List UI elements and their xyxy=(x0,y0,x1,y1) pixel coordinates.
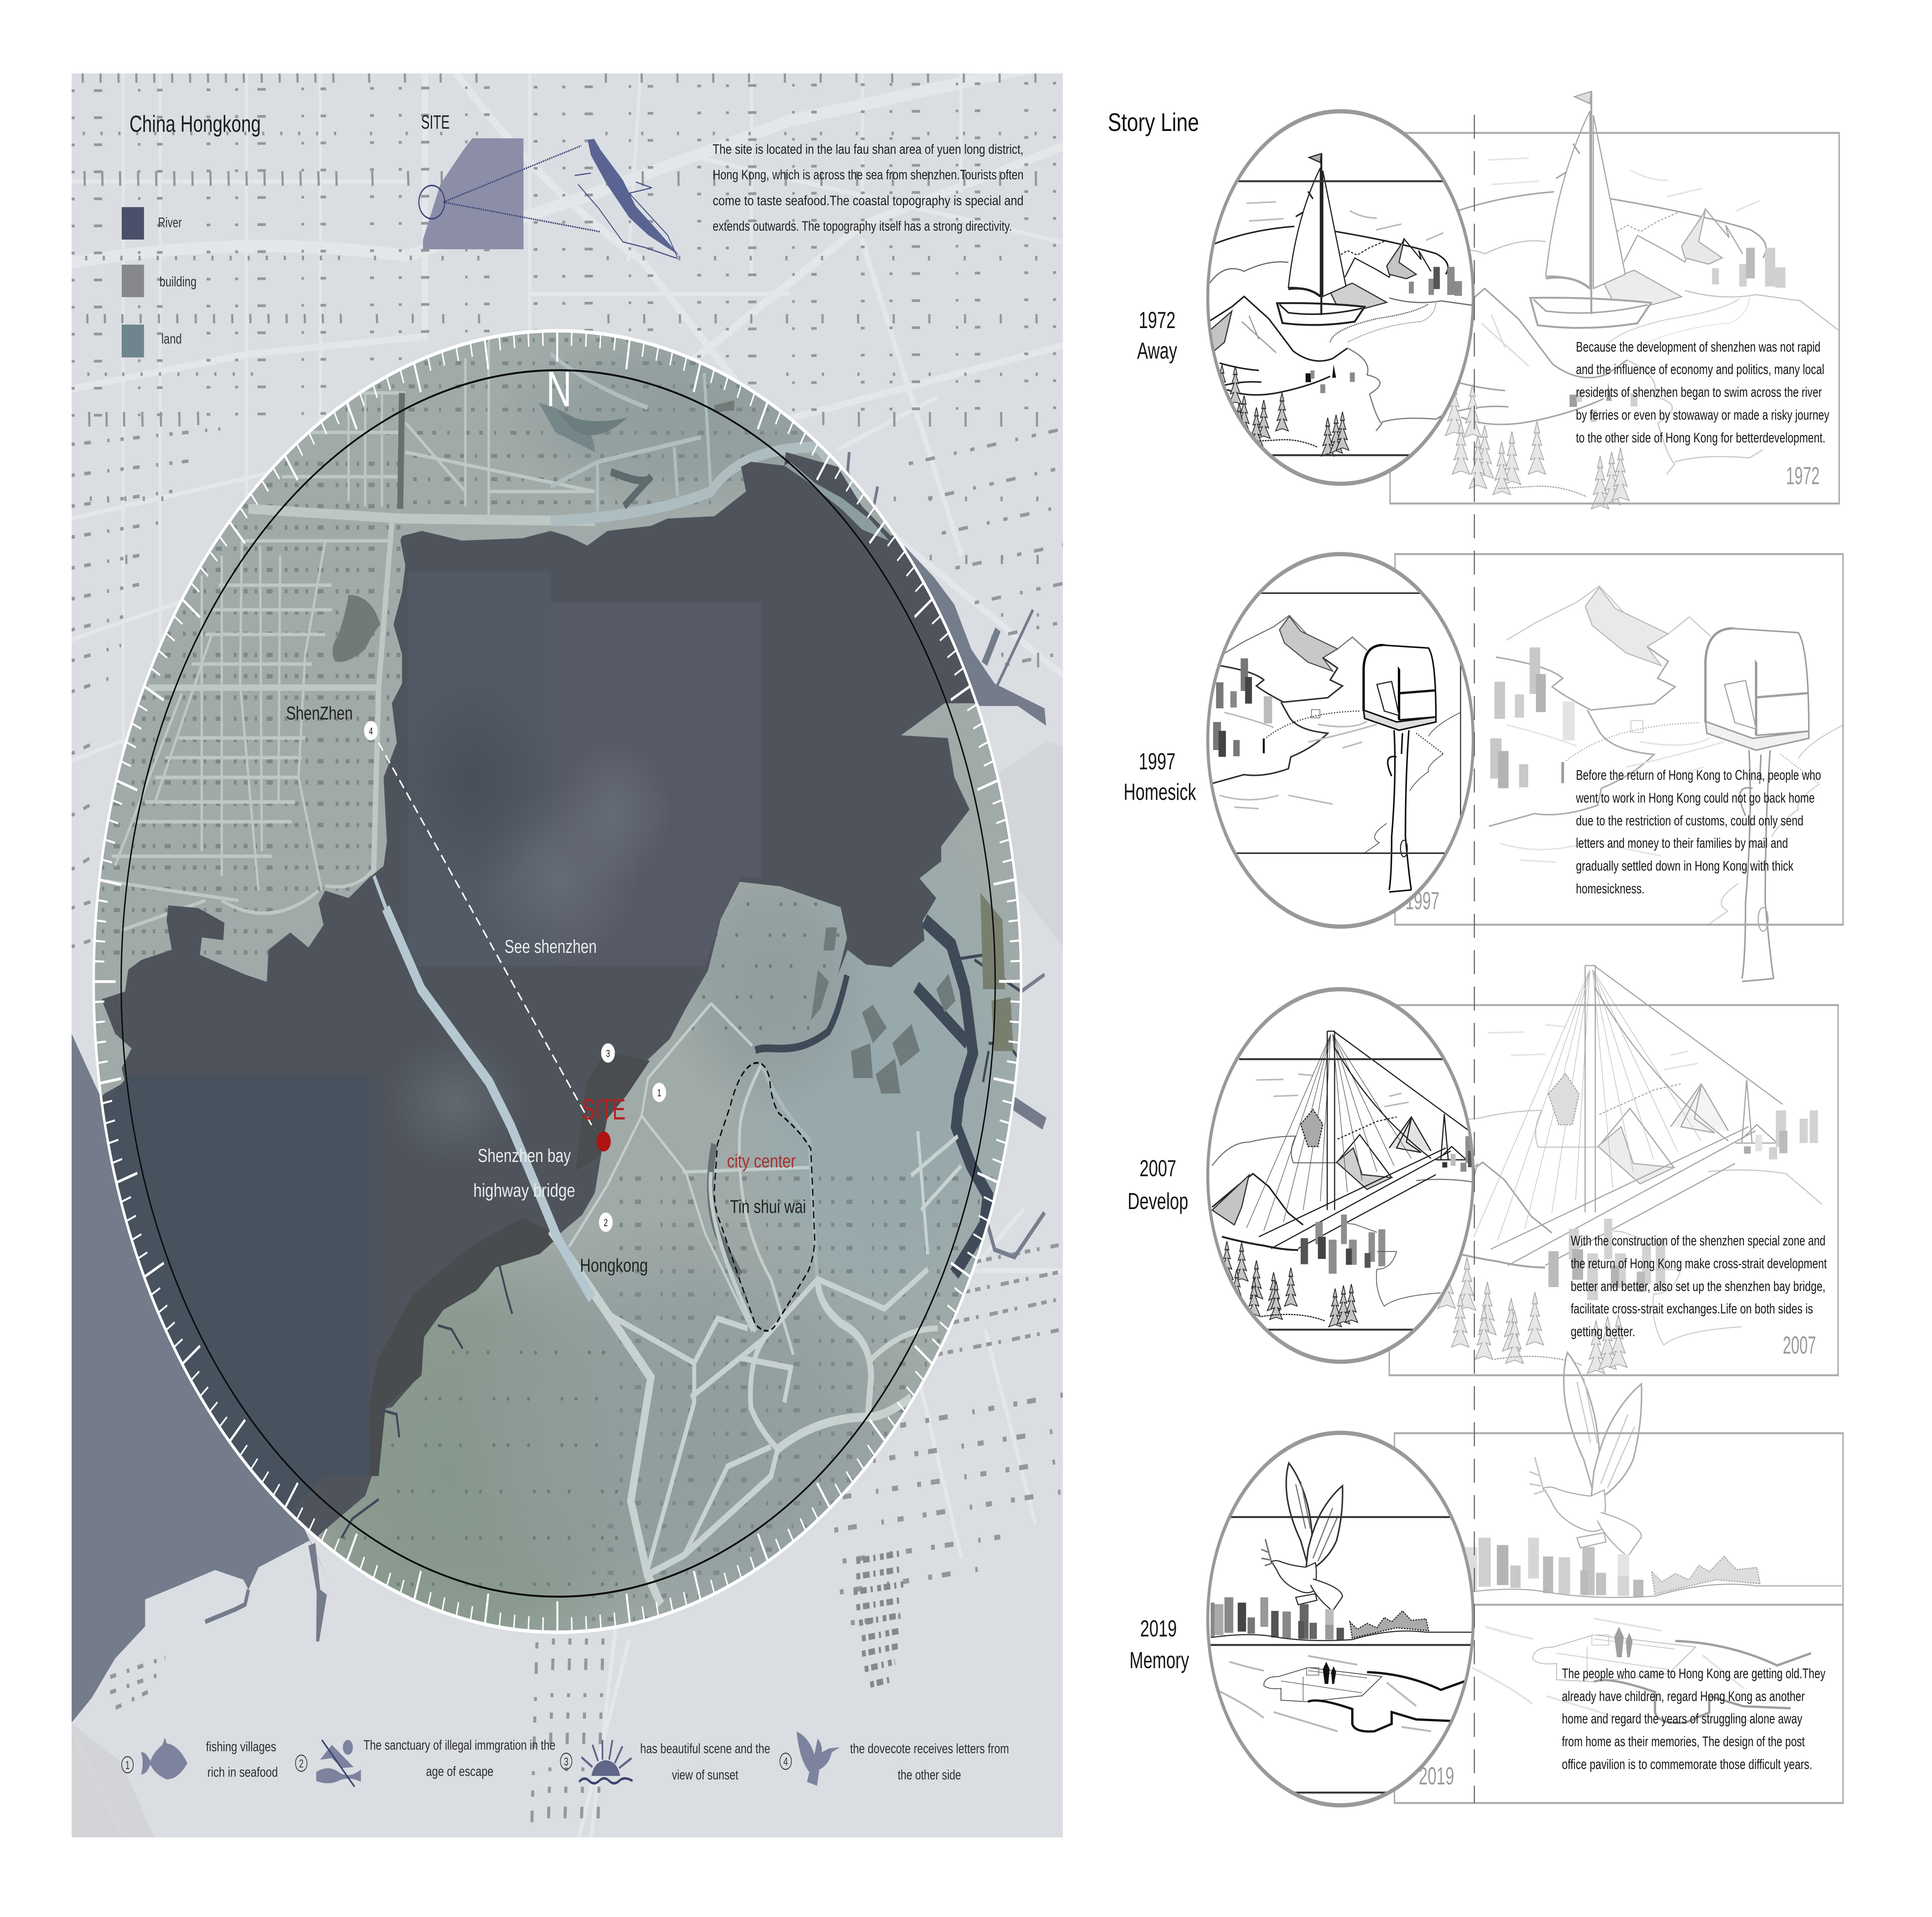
story 2019: frame year: 2019 xyxy=(1419,1762,1454,1790)
story 1997: frame xyxy=(1395,554,1843,925)
label: ShenZhen: ShenZhen xyxy=(286,703,353,723)
story 1997: year and theme: 1997 xyxy=(1139,749,1175,775)
story 1972: year and theme: Away xyxy=(1137,338,1177,364)
site description xyxy=(713,142,1024,234)
story 2019: year and theme: 2019 xyxy=(1140,1616,1177,1642)
Shenzhen roads xyxy=(105,339,595,930)
marker 2: 2 xyxy=(604,1217,608,1228)
legend: land: land xyxy=(162,331,182,347)
story 1997: circle vignette xyxy=(1208,554,1473,927)
story 1997: text: gradually settled down in Hong Kong with thick xyxy=(1576,858,1794,874)
story 2007: frame year: 2007 xyxy=(1783,1331,1816,1359)
story 1997: text: went to work in Hong Kong could not go back home xyxy=(1576,790,1815,806)
story 2019: year and theme: Memory xyxy=(1129,1648,1189,1674)
story 1997: year and theme xyxy=(1124,749,1196,805)
story 1972: text: by ferries or even by stowaway or made a risky journey xyxy=(1576,407,1829,423)
story 1972: year and theme: 1972 xyxy=(1139,308,1175,333)
story 1972: frame xyxy=(1390,133,1839,503)
base map: roads xyxy=(71,61,1062,1836)
story 2007: circle vignette xyxy=(1208,989,1499,1362)
fish ponds xyxy=(811,893,1014,1094)
story 1972: year and theme xyxy=(1137,308,1177,364)
site description: extends outwards. The topography itself has a strong directivity. xyxy=(713,219,1012,234)
feature 1: fishing villages: rich in seafood xyxy=(207,1765,278,1780)
feature 3: sunset xyxy=(560,1740,770,1783)
story 2007: text: getting better. xyxy=(1571,1324,1635,1339)
marker 2 xyxy=(599,1213,613,1232)
aerial map inside the ring xyxy=(55,317,1036,1716)
story 2019: circle vignette xyxy=(1208,1433,1488,1805)
legend: land xyxy=(122,325,182,357)
label: Hongkong: Hongkong xyxy=(580,1255,648,1276)
story 2007: year and theme xyxy=(1128,1156,1188,1214)
story 1972: text: residents of shenzhen began to swim across the river xyxy=(1576,384,1822,400)
story 1972: frame year: 1972 xyxy=(1786,462,1820,490)
feature 4: dovecote: 4 xyxy=(783,1755,788,1768)
feature 3: sunset: 3 xyxy=(564,1755,568,1768)
main river and tributaries xyxy=(342,920,1022,1538)
story 2019: text xyxy=(1562,1666,1826,1772)
legend: building: building xyxy=(160,274,197,289)
outer water: estuary xyxy=(71,452,1046,1723)
site label: SITE xyxy=(582,1093,626,1126)
story 2007: text: facilitate cross-strait exchanges.Life on both sides is xyxy=(1571,1301,1813,1317)
feature 3: sunset: has beautiful scene and the xyxy=(640,1741,770,1756)
feature 2: sanctuary of immigration: 2 xyxy=(299,1757,304,1770)
water xyxy=(55,452,1036,1584)
story 2019: text: from home as their memories, The design of the post xyxy=(1562,1734,1805,1749)
site locator diagram xyxy=(419,138,679,259)
label: bridge xyxy=(473,1145,575,1201)
marker 1 xyxy=(652,1083,666,1102)
Hong Kong road network xyxy=(569,1004,817,1355)
timeline dashed divider xyxy=(1474,115,1475,1803)
icon: swimmer xyxy=(316,1740,361,1787)
icon: sunset xyxy=(579,1740,633,1783)
story 1972: text: and the influence of economy and politics, many local xyxy=(1576,362,1824,377)
building texture xyxy=(91,340,1005,1619)
feature 1: fishing villages xyxy=(122,1737,278,1780)
Shenzhen bay bridge xyxy=(374,876,592,1299)
north shore roads, Futian side xyxy=(551,354,861,521)
base map: buildings xyxy=(71,73,1063,1837)
wetland strip north-east xyxy=(784,462,889,541)
label: bridge: Shenzhen bay xyxy=(478,1145,571,1166)
story 1997: faded scene xyxy=(1489,586,1844,981)
story 1972: text: to the other side of Hong Kong for betterdevelopment. xyxy=(1576,430,1825,446)
marker 3 xyxy=(601,1043,615,1063)
water tones: image seams and clouds xyxy=(91,572,761,1526)
label: see shenzhen: See shenzhen xyxy=(505,936,597,957)
panel: site map xyxy=(55,61,1063,1837)
story 2007: faded scene xyxy=(1426,966,1822,1374)
site description: come to taste seafood.The coastal topography is special and xyxy=(713,193,1024,208)
story 2007: year and theme: Develop xyxy=(1128,1189,1188,1214)
north marker: N xyxy=(546,361,571,417)
story 1972: faded scene xyxy=(1436,92,1839,509)
legend: river: River xyxy=(158,215,182,230)
feature 4: dovecote: the dovecote receives letters from xyxy=(850,1741,1009,1756)
story 2019: text: home and regard the years of struggling alone away xyxy=(1562,1711,1803,1726)
story 1972: text: Because the development of shenzhen was not rapid xyxy=(1576,339,1820,355)
label: city center: city center xyxy=(727,1150,796,1171)
story 1997: year and theme: Homesick xyxy=(1124,779,1196,805)
story 2019: text: The people who came to Hong Kong are getting old.They xyxy=(1562,1666,1826,1681)
story 1997: text: homesickness. xyxy=(1576,881,1645,896)
site description: The site is located in the lau fau shan area of yuen long district, xyxy=(713,142,1024,157)
story 2019: text: already have children, regard Hong Kong as another xyxy=(1562,1689,1805,1704)
canal and lake Shenzhen xyxy=(333,393,595,662)
feature 2: sanctuary of immigration xyxy=(296,1738,555,1787)
story 1972: text xyxy=(1576,339,1829,446)
feature 2: sanctuary of immigration: The sanctuary of illegal immgration in the xyxy=(364,1738,555,1753)
icon: dove xyxy=(797,1732,840,1786)
story 1997: frame year: 1997 xyxy=(1405,887,1439,915)
story 1997: text: letters and money to their families by mail and xyxy=(1576,835,1788,851)
story 1972: circle vignette xyxy=(1208,111,1501,484)
story 2007: text: the return of Hong Kong make cross-strait development xyxy=(1571,1256,1827,1271)
compass ring xyxy=(94,331,1021,1632)
story 2019: faded scene xyxy=(1459,1352,1842,1723)
story 2007: text: With the construction of the shenzhen special zone and xyxy=(1571,1233,1825,1249)
Tin shui wai city centre outline xyxy=(714,1063,815,1331)
heading: story line: Story Line xyxy=(1108,108,1199,137)
story 2019: year and theme xyxy=(1129,1616,1189,1674)
story 2007: year and theme: 2007 xyxy=(1139,1156,1176,1182)
marker 1: 1 xyxy=(657,1087,661,1099)
legend: building xyxy=(122,265,197,297)
marker 4 xyxy=(364,721,378,740)
view line to Shenzhen xyxy=(379,743,594,1130)
site description: Hong Kong, which is across the sea from shenzhen.Tourists often xyxy=(713,167,1024,182)
story 1997: text: due to the restriction of customs, could only send xyxy=(1576,813,1803,828)
feature 4: dovecote xyxy=(780,1732,1009,1786)
site thumbnail heading: SITE xyxy=(421,112,450,133)
story 1997: text xyxy=(1576,767,1821,896)
feature 4: dovecote: the other side xyxy=(898,1767,961,1783)
marker 4: 4 xyxy=(369,726,373,737)
story 2007: text: better and better, also set up the shenzhen bay bridge, xyxy=(1571,1279,1825,1294)
icon: fish xyxy=(141,1737,187,1779)
feature 1: fishing villages: fishing villages xyxy=(206,1739,276,1754)
legend: river xyxy=(122,207,182,240)
feature 3: sunset: view of sunset xyxy=(672,1767,738,1783)
title: China Hongkong xyxy=(129,111,261,137)
site marker xyxy=(597,1131,611,1152)
base map: reclaimed fields xyxy=(71,742,1063,1837)
feature 2: sanctuary of immigration: age of escape xyxy=(426,1764,493,1779)
story 2019: text: office pavilion is to commemorate those difficult years. xyxy=(1562,1757,1812,1772)
story 2019: frame xyxy=(1395,1433,1843,1803)
label: Tin shui wai: Tin shui wai xyxy=(730,1196,806,1217)
land tones xyxy=(248,325,1036,1716)
marker 3: 3 xyxy=(606,1048,610,1059)
legend xyxy=(122,207,197,357)
story 1997: text: Before the return of Hong Kong to China, people who xyxy=(1576,767,1821,783)
feature 1: fishing villages: 1 xyxy=(125,1758,130,1772)
story 2007: frame xyxy=(1389,1005,1838,1375)
label: bridge: highway bridge xyxy=(473,1180,575,1201)
story 2007: text xyxy=(1571,1233,1827,1339)
